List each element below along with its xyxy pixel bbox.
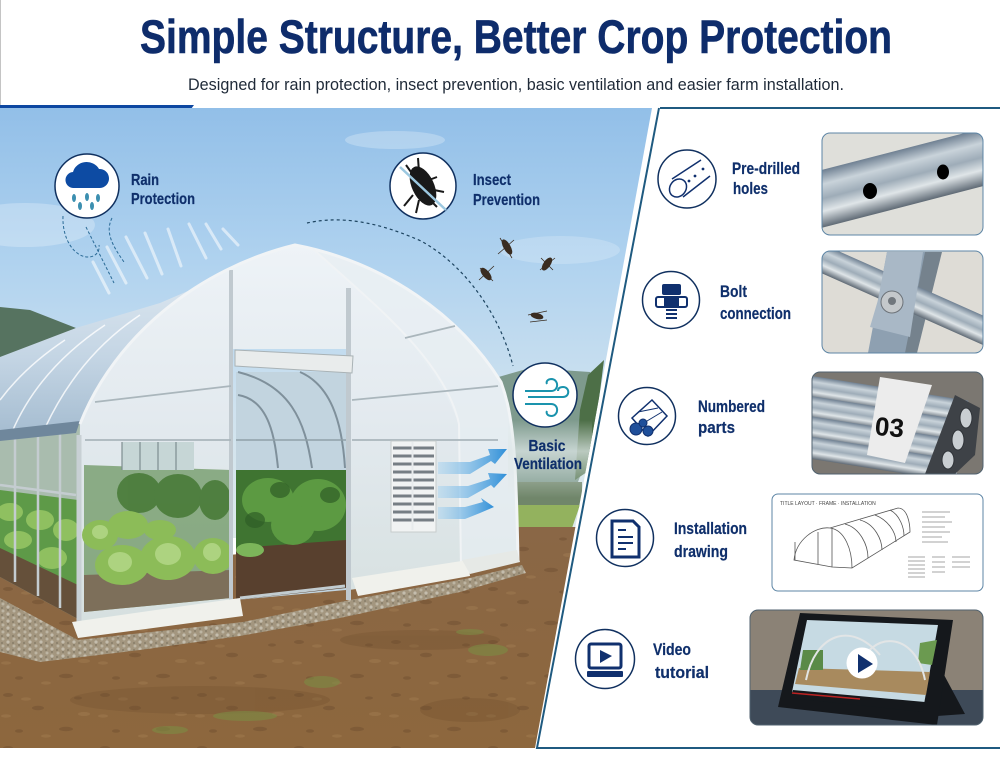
icon: pipe bbox=[658, 150, 716, 208]
greenhouse front film bbox=[78, 245, 518, 622]
photo: bolted joint bbox=[822, 250, 984, 354]
flying insects bbox=[479, 238, 555, 322]
feature: installation drawing: drawing bbox=[674, 542, 728, 561]
callout: rain protection: Rain bbox=[131, 172, 159, 189]
feature: numbered parts: Numbered bbox=[698, 397, 765, 416]
panel: greenhouse photo bbox=[0, 108, 660, 748]
ventilation label haze bbox=[512, 422, 592, 494]
greenhouse tunnel roof bbox=[0, 291, 188, 430]
airflow arrows bbox=[438, 449, 507, 519]
front interior crops bbox=[82, 442, 233, 612]
right side film bbox=[364, 264, 516, 560]
hills and trees bbox=[0, 307, 76, 357]
side wall posts bbox=[0, 432, 76, 608]
gravel strip bbox=[0, 565, 526, 662]
icon: beetle bbox=[400, 158, 446, 213]
photo: drilled pipe bbox=[822, 132, 984, 236]
feature: bolt connection: Bolt bbox=[720, 282, 747, 301]
feature: pre-drilled holes: Pre-drilled bbox=[732, 159, 800, 178]
rain dashed lines bbox=[63, 216, 124, 283]
sky bbox=[0, 108, 660, 538]
feature: pre-drilled holes bbox=[657, 132, 984, 236]
photo: drawing sheet bbox=[772, 494, 983, 591]
icon: wind bbox=[525, 379, 568, 416]
feature: video tutorial: Video bbox=[653, 640, 691, 659]
base skirts bbox=[72, 598, 243, 638]
vent louver bbox=[391, 441, 436, 532]
subtitle: Designed for rain protection, insect prevention, basic ventilation and easier farm installation. bbox=[188, 75, 844, 94]
feature: bolt connection: connection bbox=[720, 304, 791, 323]
callout: insect prevention: Insect bbox=[473, 172, 512, 189]
photo: numbered pipes bbox=[812, 372, 984, 474]
icon: bolt bbox=[642, 272, 700, 328]
panel divider bbox=[537, 108, 1000, 748]
icon: pipe bundle bbox=[618, 388, 676, 444]
page edge line bbox=[0, 0, 1, 108]
icon: document bbox=[596, 510, 654, 566]
soil bbox=[0, 527, 580, 748]
door frame and roller bbox=[229, 270, 233, 605]
feature: video tutorial bbox=[576, 610, 983, 725]
callout: basic ventilation: Basic bbox=[528, 438, 566, 455]
feature: numbered parts bbox=[618, 372, 983, 482]
eave bbox=[0, 421, 80, 441]
frame arches bbox=[80, 245, 518, 568]
photo: tablet bbox=[750, 610, 983, 725]
feature: installation drawing: Installation bbox=[674, 519, 747, 538]
technical frame sketch bbox=[794, 508, 910, 568]
photo: drawing sheet: TITLE LAYOUT · FRAME · INSTALLATION bbox=[780, 501, 876, 507]
feature: numbered parts: parts bbox=[698, 418, 735, 437]
side wall interior bbox=[0, 424, 80, 619]
callout: insect prevention: Prevention bbox=[473, 192, 540, 209]
header accent bar bbox=[0, 105, 194, 113]
photo: numbered pipes: 03 bbox=[874, 411, 905, 443]
icon: video screen bbox=[576, 630, 634, 688]
feature: video tutorial: tutorial bbox=[655, 663, 709, 682]
feature: installation drawing bbox=[596, 494, 983, 591]
callout: rain protection bbox=[55, 154, 195, 218]
feature: pre-drilled holes: holes bbox=[733, 179, 768, 198]
callout: basic ventilation: Ventilation bbox=[514, 456, 582, 473]
insect dashed arc bbox=[307, 220, 513, 366]
callout: insect prevention bbox=[390, 153, 540, 219]
feature: bolt connection bbox=[642, 250, 984, 354]
callout: basic ventilation bbox=[513, 363, 582, 473]
door opening bbox=[236, 372, 346, 600]
callout: rain protection: Protection bbox=[131, 191, 195, 208]
icon: rain cloud bbox=[65, 162, 109, 188]
rain streaks bbox=[93, 224, 238, 293]
